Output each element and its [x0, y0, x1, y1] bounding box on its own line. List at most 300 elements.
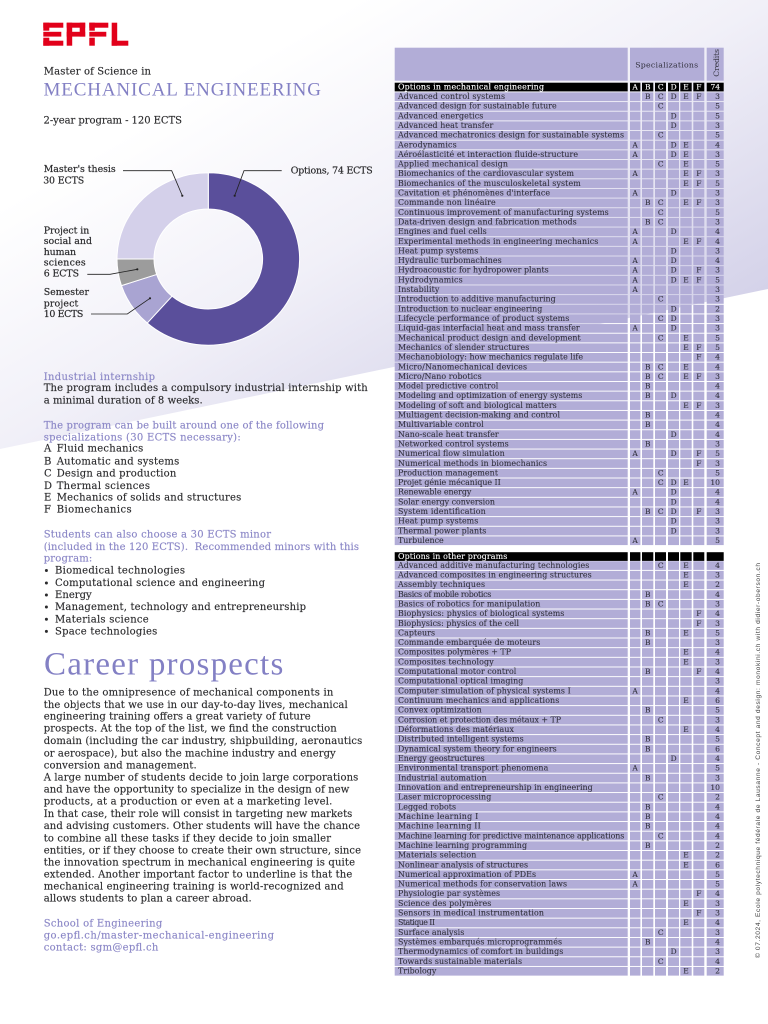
- row: Materials selection: Materials selection: [398, 851, 476, 860]
- row: Mechanobiology: how mechanics regulate life: 4: [715, 353, 720, 362]
- text block: specializations: Design and production: [57, 469, 177, 480]
- row: Networked control systems: B: [645, 439, 651, 448]
- section row: options in mechanical engineering: ABCDEF: [631, 82, 701, 91]
- row: Energy geostructures: 4: [715, 754, 720, 763]
- row: Basics of mobile robotics: B: [645, 590, 651, 599]
- label: project in social and human sciences: [44, 225, 92, 280]
- row: Advanced heat transfer: D: [671, 121, 677, 130]
- row: Engines and fuel cells: AD: [631, 227, 677, 236]
- row: Computational optical imaging: 3: [715, 677, 720, 686]
- row: Towards sustainable materials: C: [658, 957, 664, 966]
- row: Capteurs: 5: [715, 628, 720, 637]
- row: Legged robots: 4: [715, 802, 720, 811]
- row: Surface analysis: Surface analysis: [398, 928, 464, 937]
- row: Multivariable control: Multivariable control: [398, 420, 484, 429]
- row: Biomechanics of the musculoskeletal system: EF: [683, 179, 701, 188]
- text block: industrial internship: The program includes a compulsory industrial internship with: [44, 383, 368, 394]
- row: Corrosion et protection des métaux + TP: C: [658, 715, 664, 724]
- row: Industrial automation: [395, 773, 724, 782]
- row: Heat pump systems: 3: [715, 246, 720, 255]
- row: Tribology: 2: [715, 967, 720, 976]
- label: options: Options, 74 ECTS: [291, 165, 373, 176]
- text block: recommended minors: Space technologies: [55, 626, 157, 637]
- row: Experimental methods in engineering mechanics: AEF: [631, 237, 701, 246]
- row: Experimental methods in engineering mechanics: [395, 237, 724, 246]
- row: Advanced control systems: [395, 92, 724, 101]
- row: Biomechanics of the cardiovascular system: [395, 169, 724, 178]
- row: Nano-scale heat transfer: D: [671, 430, 677, 439]
- row: Advanced control systems: Advanced control systems: [397, 92, 505, 101]
- label: master's thesis: [43, 164, 116, 186]
- row: Systèmes embarqués microprogrammés: Systèmes embarqués microprogrammés: [398, 938, 562, 947]
- row: Continuous improvement of manufacturing systems: C: [658, 208, 664, 217]
- row: Laser microprocessing: [395, 793, 724, 802]
- row: Introduction to additive manufacturing: 3: [715, 295, 720, 304]
- row: Commande embarquée de moteurs: 3: [715, 638, 720, 647]
- row: Data-driven design and fabrication methods: [395, 217, 724, 227]
- text block: specializations: C: [44, 469, 52, 480]
- row: Engines and fuel cells: [395, 227, 724, 236]
- row: Computational optical imaging: [395, 677, 724, 686]
- row: Continuum mechanics and applications: Continuum mechanics and applications: [398, 696, 559, 705]
- row: Biophysics: physics of biological systems: F: [696, 609, 701, 618]
- row: Hydrodynamics: 5: [715, 275, 720, 284]
- row: Multivariable control: B: [645, 420, 651, 429]
- row: Déformations des matériaux: E: [683, 725, 689, 734]
- row: Convex optimization: B: [645, 706, 651, 715]
- row: Machine learning for predictive maintenance applications: Machine learning for predictive maintenance applications: [398, 831, 624, 840]
- text block: career prospects body: products, at a production or even at a marketing level.: [44, 797, 332, 808]
- row: Hydrodynamics: [395, 275, 724, 284]
- row: Multiagent decision-making and control: [395, 411, 724, 420]
- row: Assembly techniques: [395, 580, 724, 589]
- row: Biomechanics of the cardiovascular system: 3: [715, 169, 720, 178]
- row: Aéroélasticité et interaction fluide-structure: ADE: [631, 150, 689, 159]
- row: Turbulence: Turbulence: [398, 536, 444, 545]
- row: Numerical flow simulation: ADF: [631, 449, 701, 458]
- row: Mechanical product design and development: Mechanical product design and development: [398, 333, 582, 342]
- row: Statique II: Statique II: [398, 918, 435, 927]
- logo: EPFL: [43, 23, 128, 46]
- row: Composites technology: Composites technology: [398, 657, 494, 666]
- text block: specializations: B: [44, 456, 51, 467]
- donut chart: ECTS breakdown: [117, 173, 300, 345]
- label: project in social and human sciences: social and: [44, 236, 92, 247]
- segment: master's thesis 30 ECTS: [117, 173, 208, 259]
- row: Mechanobiology: how mechanics regulate life: F: [696, 353, 701, 362]
- row: Laser microprocessing: Laser microprocessing: [398, 793, 491, 802]
- row: Advanced mechatronics design for sustainable systems: [395, 131, 724, 140]
- row: Commande embarquée de moteurs: [395, 638, 724, 647]
- row: Machine learning II: 4: [715, 822, 720, 831]
- row: Nano-scale heat transfer: [395, 430, 724, 439]
- row: Science des polymères: Science des polymères: [398, 899, 491, 908]
- row: Micro/Nanomechanical devices: BCE: [645, 362, 689, 371]
- row: Sensors in medical instrumentation: F: [696, 909, 701, 918]
- row: Statique II: 4: [715, 918, 720, 927]
- row: Nonlinear analysis of structures: E: [683, 860, 689, 869]
- row: Advanced energetics: Advanced energetics: [397, 111, 483, 120]
- row: Mechanics of slender structures: EF: [683, 343, 701, 352]
- row: Machine learning I: B: [645, 812, 651, 821]
- row: Corrosion et protection des métaux + TP: Corrosion et protection des métaux + TP: [398, 715, 562, 724]
- row: Numerical approximation of PDEs: 5: [715, 870, 720, 879]
- row: Innovation and entrepreneurship in engineering: Innovation and entrepreneurship in engineering: [398, 783, 593, 792]
- text block: career prospects body: engineering training offers a great variety of future: [44, 712, 311, 723]
- row: Biophysics: physics of the cell: [395, 619, 724, 628]
- contact details: [44, 919, 275, 953]
- row: Applied mechanical design: 5: [715, 160, 720, 169]
- row: Renewable energy: AD: [631, 488, 677, 497]
- row: Continuum mechanics and applications: [395, 696, 724, 705]
- row: Nano-scale heat transfer: 4: [715, 430, 720, 439]
- section row: options in mechanical engineering: [395, 82, 724, 91]
- program duration: 2-year program - 120 ECTS: [44, 116, 182, 127]
- subtitle: Master of Science in: Master of Science in: [44, 67, 152, 78]
- row: Data-driven design and fabrication methods: BC: [645, 217, 664, 226]
- row: Machine learning I: [395, 812, 724, 821]
- row: Networked control systems: Networked control systems: [398, 439, 509, 448]
- row: Advanced design for sustainable future: 5: [715, 102, 720, 111]
- row: Basics of robotics for manipulation: 3: [715, 599, 720, 608]
- row: Biophysics: physics of the cell: Biophysics: physics of the cell: [398, 619, 519, 628]
- table header: Specializations: [635, 60, 698, 69]
- row: Energy geostructures: D: [671, 754, 677, 763]
- row: Renewable energy: 4: [715, 488, 720, 497]
- contact details: go.epfl.ch/master-mechanical-engineering: [44, 930, 275, 941]
- row: Basics of robotics for manipulation: [395, 599, 724, 609]
- row: Instability: A: [631, 285, 638, 294]
- row: Basics of mobile robotics: 4: [715, 590, 720, 599]
- row: Experimental methods in engineering mechanics: Experimental methods in engineering mechanics: [398, 237, 598, 246]
- row: Engines and fuel cells: Engines and fuel cells: [398, 227, 487, 236]
- row: Commande non linéaire: 3: [715, 198, 720, 207]
- row: Science des polymères: [395, 899, 724, 908]
- label: project in social and human sciences: human: [44, 247, 76, 258]
- row: Machine learning for predictive maintenance applications: [395, 831, 724, 840]
- row: Computational motor control: BF: [645, 667, 701, 676]
- row: Computer simulation of physical systems I: [395, 686, 724, 695]
- row: Advanced heat transfer: Advanced heat transfer: [397, 121, 494, 130]
- row: Hydraulic turbomachines: AD: [631, 256, 677, 265]
- title: Mechanical Engineering: MECHANICAL ENGINEERING: [44, 79, 321, 100]
- row: Advanced composites in engineering structures: Advanced composites in engineering structures: [397, 570, 592, 579]
- row: Mechanobiology: how mechanics regulate life: [395, 353, 724, 362]
- heading: career prospects: Career prospects: [44, 646, 283, 682]
- row: Numerical methods for conservation laws: Numerical methods for conservation laws: [398, 880, 567, 889]
- row: Materials selection: [395, 851, 724, 860]
- row: Numerical flow simulation: 5: [715, 449, 720, 458]
- text block: career prospects body: conversion and management.: [44, 760, 197, 771]
- row: Commande embarquée de moteurs: Commande embarquée de moteurs: [398, 638, 540, 647]
- row: Machine learning for predictive maintenance applications: 4: [715, 831, 720, 840]
- text block: industrial internship: a minimal duration of 8 weeks.: [44, 395, 203, 406]
- row: Thermal power plants: Thermal power plants: [398, 526, 486, 535]
- row: Biomechanics of the musculoskeletal system: Biomechanics of the musculoskeletal system: [398, 179, 581, 188]
- row: Environmental transport phenomena: Environmental transport phenomena: [398, 764, 549, 773]
- row: Heat pump systems: D: [671, 246, 677, 255]
- label: project in social and human sciences: 6 ECTS: [44, 269, 79, 280]
- row: Continuous improvement of manufacturing systems: Continuous improvement of manufacturing systems: [398, 208, 609, 217]
- row: Aerodynamics: Aerodynamics: [397, 140, 457, 149]
- contact details: contact: sgm@epfl.ch: [44, 942, 159, 953]
- row: Sensors in medical instrumentation: Sensors in medical instrumentation: [398, 909, 544, 918]
- row: Science des polymères: E: [683, 899, 689, 908]
- row: Thermodynamics of comfort in buildings: Thermodynamics of comfort in buildings: [398, 947, 563, 956]
- text block: industrial internship: Industrial internship: [44, 372, 155, 383]
- row: Thermal power plants: D: [671, 526, 677, 535]
- row: Systèmes embarqués microprogrammés: 4: [715, 938, 720, 947]
- section row: options in mechanical engineering: Options in mechanical engineering: [398, 82, 544, 91]
- row: Convex optimization: [395, 706, 724, 715]
- row: Biophysics: physics of biological systems: 4: [715, 609, 720, 618]
- row: Advanced additive manufacturing technologies: 4: [715, 561, 720, 570]
- row: Aéroélasticité et interaction fluide-structure: 3: [715, 150, 720, 159]
- text block: specializations: The program can be built around one of the following: [44, 420, 325, 431]
- text block: specializations: specializations (30 ECTS necessary):: [44, 432, 241, 443]
- row: Liquid-gas interfacial heat and mass transfer: [395, 324, 724, 333]
- row: Hydroacoustic for hydropower plants: ADF: [631, 266, 701, 275]
- label: semester project: 10 ECTS: [44, 309, 83, 320]
- row: Machine learning II: [395, 822, 724, 831]
- text block: recommended minors: Materials science: [55, 614, 149, 625]
- row: Advanced composites in engineering structures: 3: [715, 570, 720, 579]
- row: Corrosion et protection des métaux + TP: 3: [715, 715, 720, 724]
- row: Science des polymères: 3: [715, 899, 720, 908]
- text block: career prospects body: to combine all these tasks if they decide to join smaller: [44, 833, 331, 844]
- row: Advanced composites in engineering structures: [395, 570, 724, 580]
- row: Thermodynamics of comfort in buildings: D: [671, 947, 677, 956]
- row: Surface analysis: C: [658, 928, 664, 937]
- row: Dynamical system theory for engineers: 6: [715, 744, 720, 753]
- row: Biomechanics of the musculoskeletal system: [395, 179, 724, 188]
- chart leader lines: [87, 171, 282, 314]
- row: Mechanics of slender structures: Mechanics of slender structures: [398, 343, 529, 352]
- row: Towards sustainable materials: [395, 957, 724, 966]
- row: Micro/Nano robotics: 3: [715, 372, 720, 381]
- row: Biophysics: physics of the cell: 3: [715, 619, 720, 628]
- row: Micro/Nanomechanical devices: [395, 362, 724, 371]
- label: master's thesis: 30 ECTS: [43, 175, 84, 186]
- row: Thermal power plants: 3: [715, 526, 720, 535]
- row: Computer simulation of physical systems I: A: [631, 686, 638, 695]
- background gradient panel: [0, 0, 768, 449]
- row: Déformations des matériaux: 4: [715, 725, 720, 734]
- text block: recommended minors: program:: [44, 554, 92, 565]
- row: Micro/Nano robotics: [395, 372, 724, 381]
- row: Innovation and entrepreneurship in engineering: 10: [710, 783, 720, 792]
- row: Turbulence: A: [631, 536, 638, 545]
- table: course options: [395, 48, 724, 976]
- row: Multiagent decision-making and control: B: [645, 411, 651, 420]
- row: Modeling and optimization of energy systems: BD: [645, 391, 677, 400]
- row: Micro/Nano robotics: Micro/Nano robotics: [398, 372, 482, 381]
- row: Renewable energy: [395, 488, 724, 497]
- row: Advanced design for sustainable future: [395, 102, 724, 111]
- row: Thermal power plants: [395, 526, 724, 535]
- row: Hydroacoustic for hydropower plants: 3: [715, 266, 720, 275]
- row: Advanced control systems: BCDEF: [645, 92, 701, 101]
- row: Surface analysis: [395, 928, 724, 937]
- row: Model predictive control: [395, 382, 724, 391]
- row: Machine learning II: B: [645, 822, 651, 831]
- row: Numerical methods for conservation laws: A: [631, 880, 638, 889]
- text block: industrial internship: [44, 372, 368, 406]
- section row: options in other programs: [395, 552, 724, 561]
- row: Distributed intelligent systems: Distributed intelligent systems: [398, 735, 524, 744]
- row: Turbulence: [395, 536, 724, 545]
- row: Advanced heat transfer: 3: [715, 121, 720, 130]
- text block: recommended minors: (included in the 120 ECTS). Recommended minors with this: [44, 542, 359, 553]
- row: System identification: 3: [715, 507, 720, 516]
- row: Solar energy conversion: 4: [715, 497, 720, 506]
- row: Physiologie par systèmes: Physiologie par systèmes: [398, 889, 500, 898]
- text block: career prospects body: [43, 688, 362, 905]
- row: Continuum mechanics and applications: 6: [715, 696, 720, 705]
- row: Surface analysis: 3: [715, 928, 720, 937]
- label: project in social and human sciences: sciences: [44, 258, 86, 269]
- text block: career prospects body: entities, or if they choose to create their own structure, since: [44, 845, 361, 856]
- row: Aerodynamics: 4: [715, 140, 720, 149]
- row: Mechanical product design and development: [395, 333, 724, 342]
- row: Environmental transport phenomena: A: [631, 764, 638, 773]
- row: Micro/Nanomechanical devices: Micro/Nanomechanical devices: [398, 362, 527, 371]
- row: Heat pump systems (second): 3: [715, 517, 720, 526]
- row: Advanced composites in engineering structures: E: [683, 570, 689, 579]
- row: Data-driven design and fabrication methods: 3: [715, 217, 720, 226]
- row: Thermodynamics of comfort in buildings: 3: [715, 947, 720, 956]
- row: Machine learning programming: [395, 841, 724, 850]
- row: Industrial automation: 3: [715, 773, 720, 782]
- text block: career prospects body: and advising customers. Other students will have the chance: [44, 821, 360, 832]
- row: Advanced design for sustainable future: Advanced design for sustainable future: [397, 102, 557, 111]
- label: project in social and human sciences: Project in: [44, 225, 89, 236]
- row: Model predictive control: B: [645, 382, 651, 391]
- row: System identification: BCDF: [645, 507, 701, 516]
- row: Sensors in medical instrumentation: 3: [715, 909, 720, 918]
- row: Liquid-gas interfacial heat and mass transfer: AD: [631, 324, 677, 333]
- row: Modeling of soft and biological matters: 3: [715, 401, 720, 410]
- row: Physiologie par systèmes: F: [696, 889, 701, 898]
- row: Statique II: [395, 918, 724, 927]
- row: Engines and fuel cells: 4: [715, 227, 720, 236]
- row: Hydrodynamics: Hydrodynamics: [398, 275, 463, 284]
- row: Heat pump systems: Heat pump systems: [398, 246, 478, 255]
- row: Instability: [395, 285, 724, 294]
- row: Mechanical product design and development: CE: [658, 333, 689, 342]
- row: Lifecycle performance of product systems: [395, 314, 724, 323]
- text block: career prospects body: Due to the omnipresence of mechanical components in: [44, 688, 334, 699]
- row: Dynamical system theory for engineers: B: [645, 744, 651, 753]
- table header: [395, 48, 724, 81]
- text block: career prospects body: A large number of students decide to join large corporations: [43, 772, 358, 783]
- row: Data-driven design and fabrication methods: Data-driven design and fabrication methods: [398, 217, 577, 226]
- row: System identification: [395, 507, 724, 516]
- row: Composites technology: 3: [715, 657, 720, 666]
- row: Instability: 3: [715, 285, 720, 294]
- row: Distributed intelligent systems: [395, 735, 724, 744]
- row: Numerical methods for conservation laws: [395, 880, 724, 889]
- row: Numerical methods in biomechanics: F: [696, 459, 701, 468]
- row: Materials selection: 2: [715, 851, 720, 860]
- row: Assembly techniques: 2: [715, 580, 720, 589]
- row: Tribology: [395, 967, 724, 976]
- row: Materials selection: E: [683, 851, 689, 860]
- row: Basics of robotics for manipulation: BC: [645, 599, 664, 608]
- row: Nano-scale heat transfer: Nano-scale heat transfer: [398, 430, 499, 439]
- row: Modeling of soft and biological matters: [395, 401, 724, 410]
- row: Multivariable control: [395, 420, 724, 429]
- row: Assembly techniques: Assembly techniques: [397, 580, 485, 589]
- label: semester project: project: [44, 299, 79, 310]
- row: Experimental methods in engineering mechanics: 4: [715, 237, 720, 246]
- row: Lifecycle performance of product systems: 3: [715, 314, 720, 323]
- text block: specializations: [43, 420, 325, 516]
- row: Mechanobiology: how mechanics regulate life: Mechanobiology: how mechanics regulate life: [398, 353, 583, 362]
- row: Hydraulic turbomachines: 4: [715, 256, 720, 265]
- text block: recommended minors: Biomedical technologies: [55, 566, 185, 577]
- row: Numerical methods for conservation laws: 5: [715, 880, 720, 889]
- row: Introduction to additive manufacturing: [395, 295, 724, 304]
- text block: recommended minors: Management, technology and entrepreneurship: [55, 602, 306, 613]
- row: Computer simulation of physical systems I: Computer simulation of physical systems I: [398, 686, 571, 695]
- row: Towards sustainable materials: 4: [715, 957, 720, 966]
- row: Production management: Production management: [398, 468, 499, 477]
- row: Advanced design for sustainable future: C: [658, 102, 664, 111]
- row: Commande non linéaire: [395, 198, 724, 207]
- row: Heat pump systems (second): Heat pump systems: [398, 517, 478, 526]
- row: Advanced mechatronics design for sustainable systems: C: [658, 131, 664, 140]
- row: Liquid-gas interfacial heat and mass transfer: 3: [715, 324, 720, 333]
- row: Commande embarquée de moteurs: B: [645, 638, 651, 647]
- row: Towards sustainable materials: Towards sustainable materials: [398, 957, 522, 966]
- text block: specializations: Automatic and systems: [56, 456, 179, 467]
- row: Legged robots: B: [645, 802, 651, 811]
- table header: Credits: [712, 49, 721, 77]
- row: Machine learning programming: 2: [715, 841, 720, 850]
- row: Advanced mechatronics design for sustainable systems: 5: [715, 131, 720, 140]
- row: Sensors in medical instrumentation: [395, 909, 724, 918]
- row: Corrosion et protection des métaux + TP: [395, 715, 724, 724]
- row: Commande non linéaire: BCEF: [645, 198, 701, 207]
- row: Convex optimization: 5: [715, 706, 720, 715]
- row: Projet génie mécanique II: Projet génie mécanique II: [398, 478, 501, 487]
- row: Cavitation et phénomènes d'interface: 3: [715, 189, 720, 198]
- row: Turbulence: 5: [715, 536, 720, 545]
- text block: specializations: Mechanics of solids and structures: [57, 493, 241, 504]
- text block: recommended minors: [44, 530, 359, 637]
- row: Machine learning I: 4: [715, 812, 720, 821]
- vertical credit line: © 07.2024, Ecole polytechnique fédérale de Lausanne - Concept and design: monokini.ch with didier-oberson.ch: [754, 563, 762, 958]
- row: Physiologie par systèmes: [395, 889, 724, 898]
- row: Energy geostructures: Energy geostructures: [398, 754, 485, 763]
- section row: options in other programs: Options in other programs: [398, 552, 507, 561]
- row: Nonlinear analysis of structures: 6: [715, 860, 720, 869]
- row: Modeling and optimization of energy systems: Modeling and optimization of energy systems: [398, 391, 582, 400]
- row: Systèmes embarqués microprogrammés: B: [645, 938, 651, 947]
- row: Multiagent decision-making and control: Multiagent decision-making and control: [398, 411, 560, 420]
- row: Composites polymères + TP: E: [683, 648, 689, 657]
- row: Multivariable control: 4: [715, 420, 720, 429]
- row: Numerical approximation of PDEs: [395, 870, 724, 879]
- row: Innovation and entrepreneurship in engineering: [395, 783, 724, 792]
- text block: career prospects body: In that case, their role will consist in targeting new markets: [44, 809, 352, 820]
- row: Déformations des matériaux: Déformations des matériaux: [398, 725, 515, 734]
- row: Continuum mechanics and applications: E: [683, 696, 689, 705]
- row: Advanced additive manufacturing technologies: Advanced additive manufacturing technologies: [397, 561, 589, 570]
- row: Composites polymères + TP: 4: [715, 648, 720, 657]
- row: Modeling of soft and biological matters: EF: [683, 401, 701, 410]
